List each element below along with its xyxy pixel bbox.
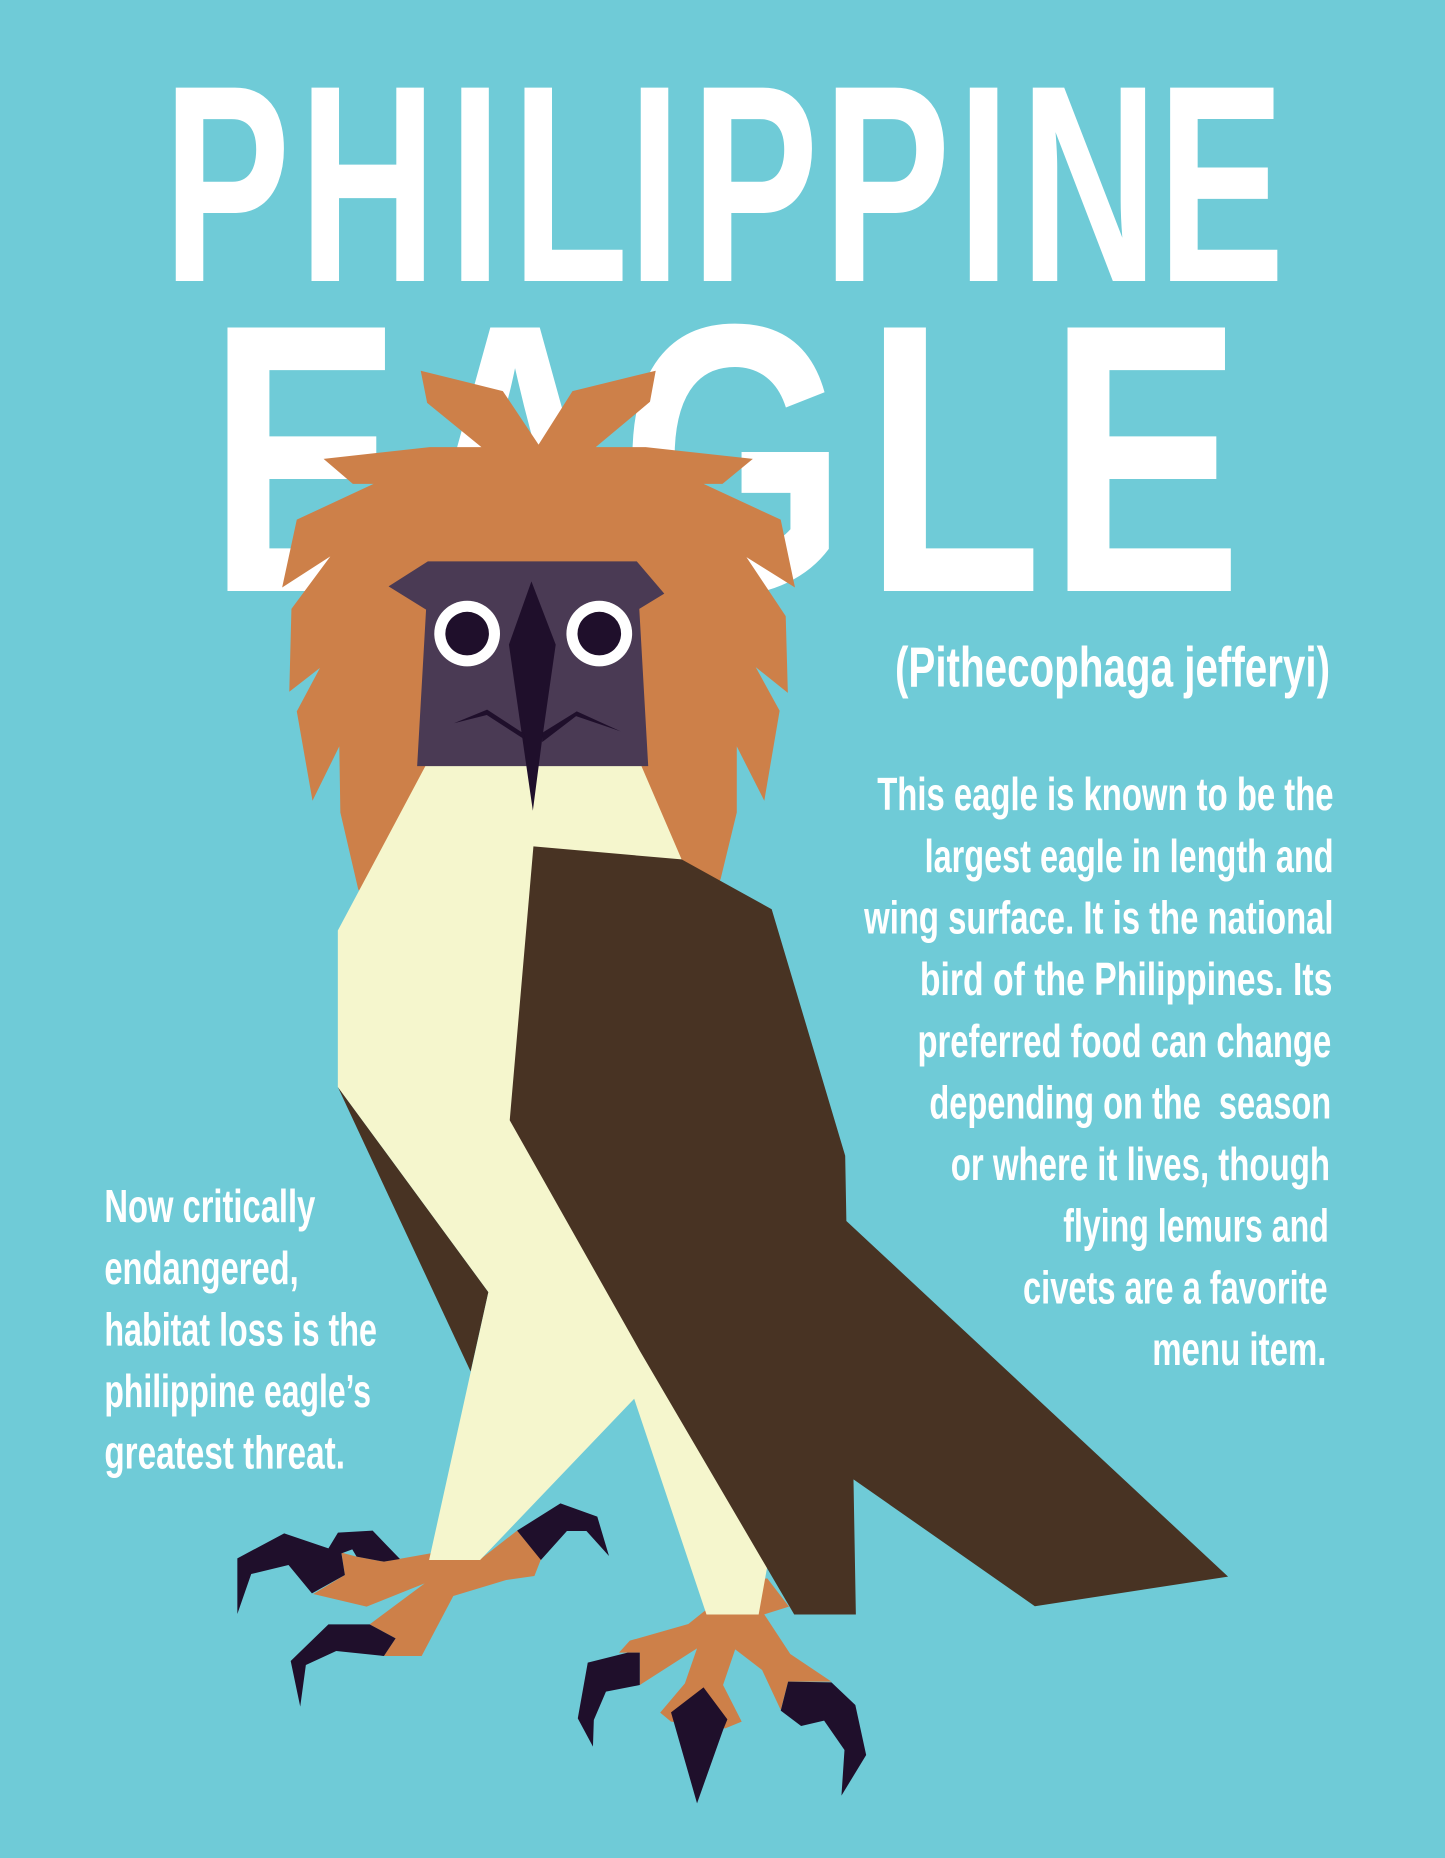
eagle body and wing [338, 766, 1228, 1615]
eagle feet [313, 1531, 831, 1728]
right eye [566, 601, 632, 666]
eagle illustration [237, 371, 1228, 1803]
eagle face [389, 561, 664, 811]
text block: conservation note: philippine eagle’s [104, 1365, 371, 1417]
text block: conservation note: greatest threat. [104, 1427, 345, 1479]
cream chest and legs [338, 766, 830, 1615]
title: Philippine Eagle [163, 26, 1285, 673]
text block: description: menu item. [1152, 1323, 1326, 1375]
title line: PHILIPPINE: PHILIPPINE [163, 26, 1285, 341]
eagle talons [237, 1503, 866, 1803]
text block: conservation note: habitat loss is the [104, 1303, 377, 1355]
title line: EAGLE: EAGLE [208, 245, 1242, 673]
text block: description [863, 768, 1334, 1375]
text block: description: civets are a favorite [1023, 1261, 1328, 1313]
eagle head feathers [282, 371, 795, 957]
face mask [389, 561, 664, 766]
back wing shadow [338, 1087, 488, 1372]
brown wing and tail [510, 846, 1228, 1615]
beak and mouth [454, 581, 621, 811]
text block: conservation note: Now critically [104, 1180, 316, 1232]
text block: conservation note: endangered, [104, 1242, 299, 1294]
left eye [434, 601, 500, 666]
text block: conservation note [104, 1180, 377, 1479]
text block: description: flying lemurs and [1063, 1200, 1329, 1252]
